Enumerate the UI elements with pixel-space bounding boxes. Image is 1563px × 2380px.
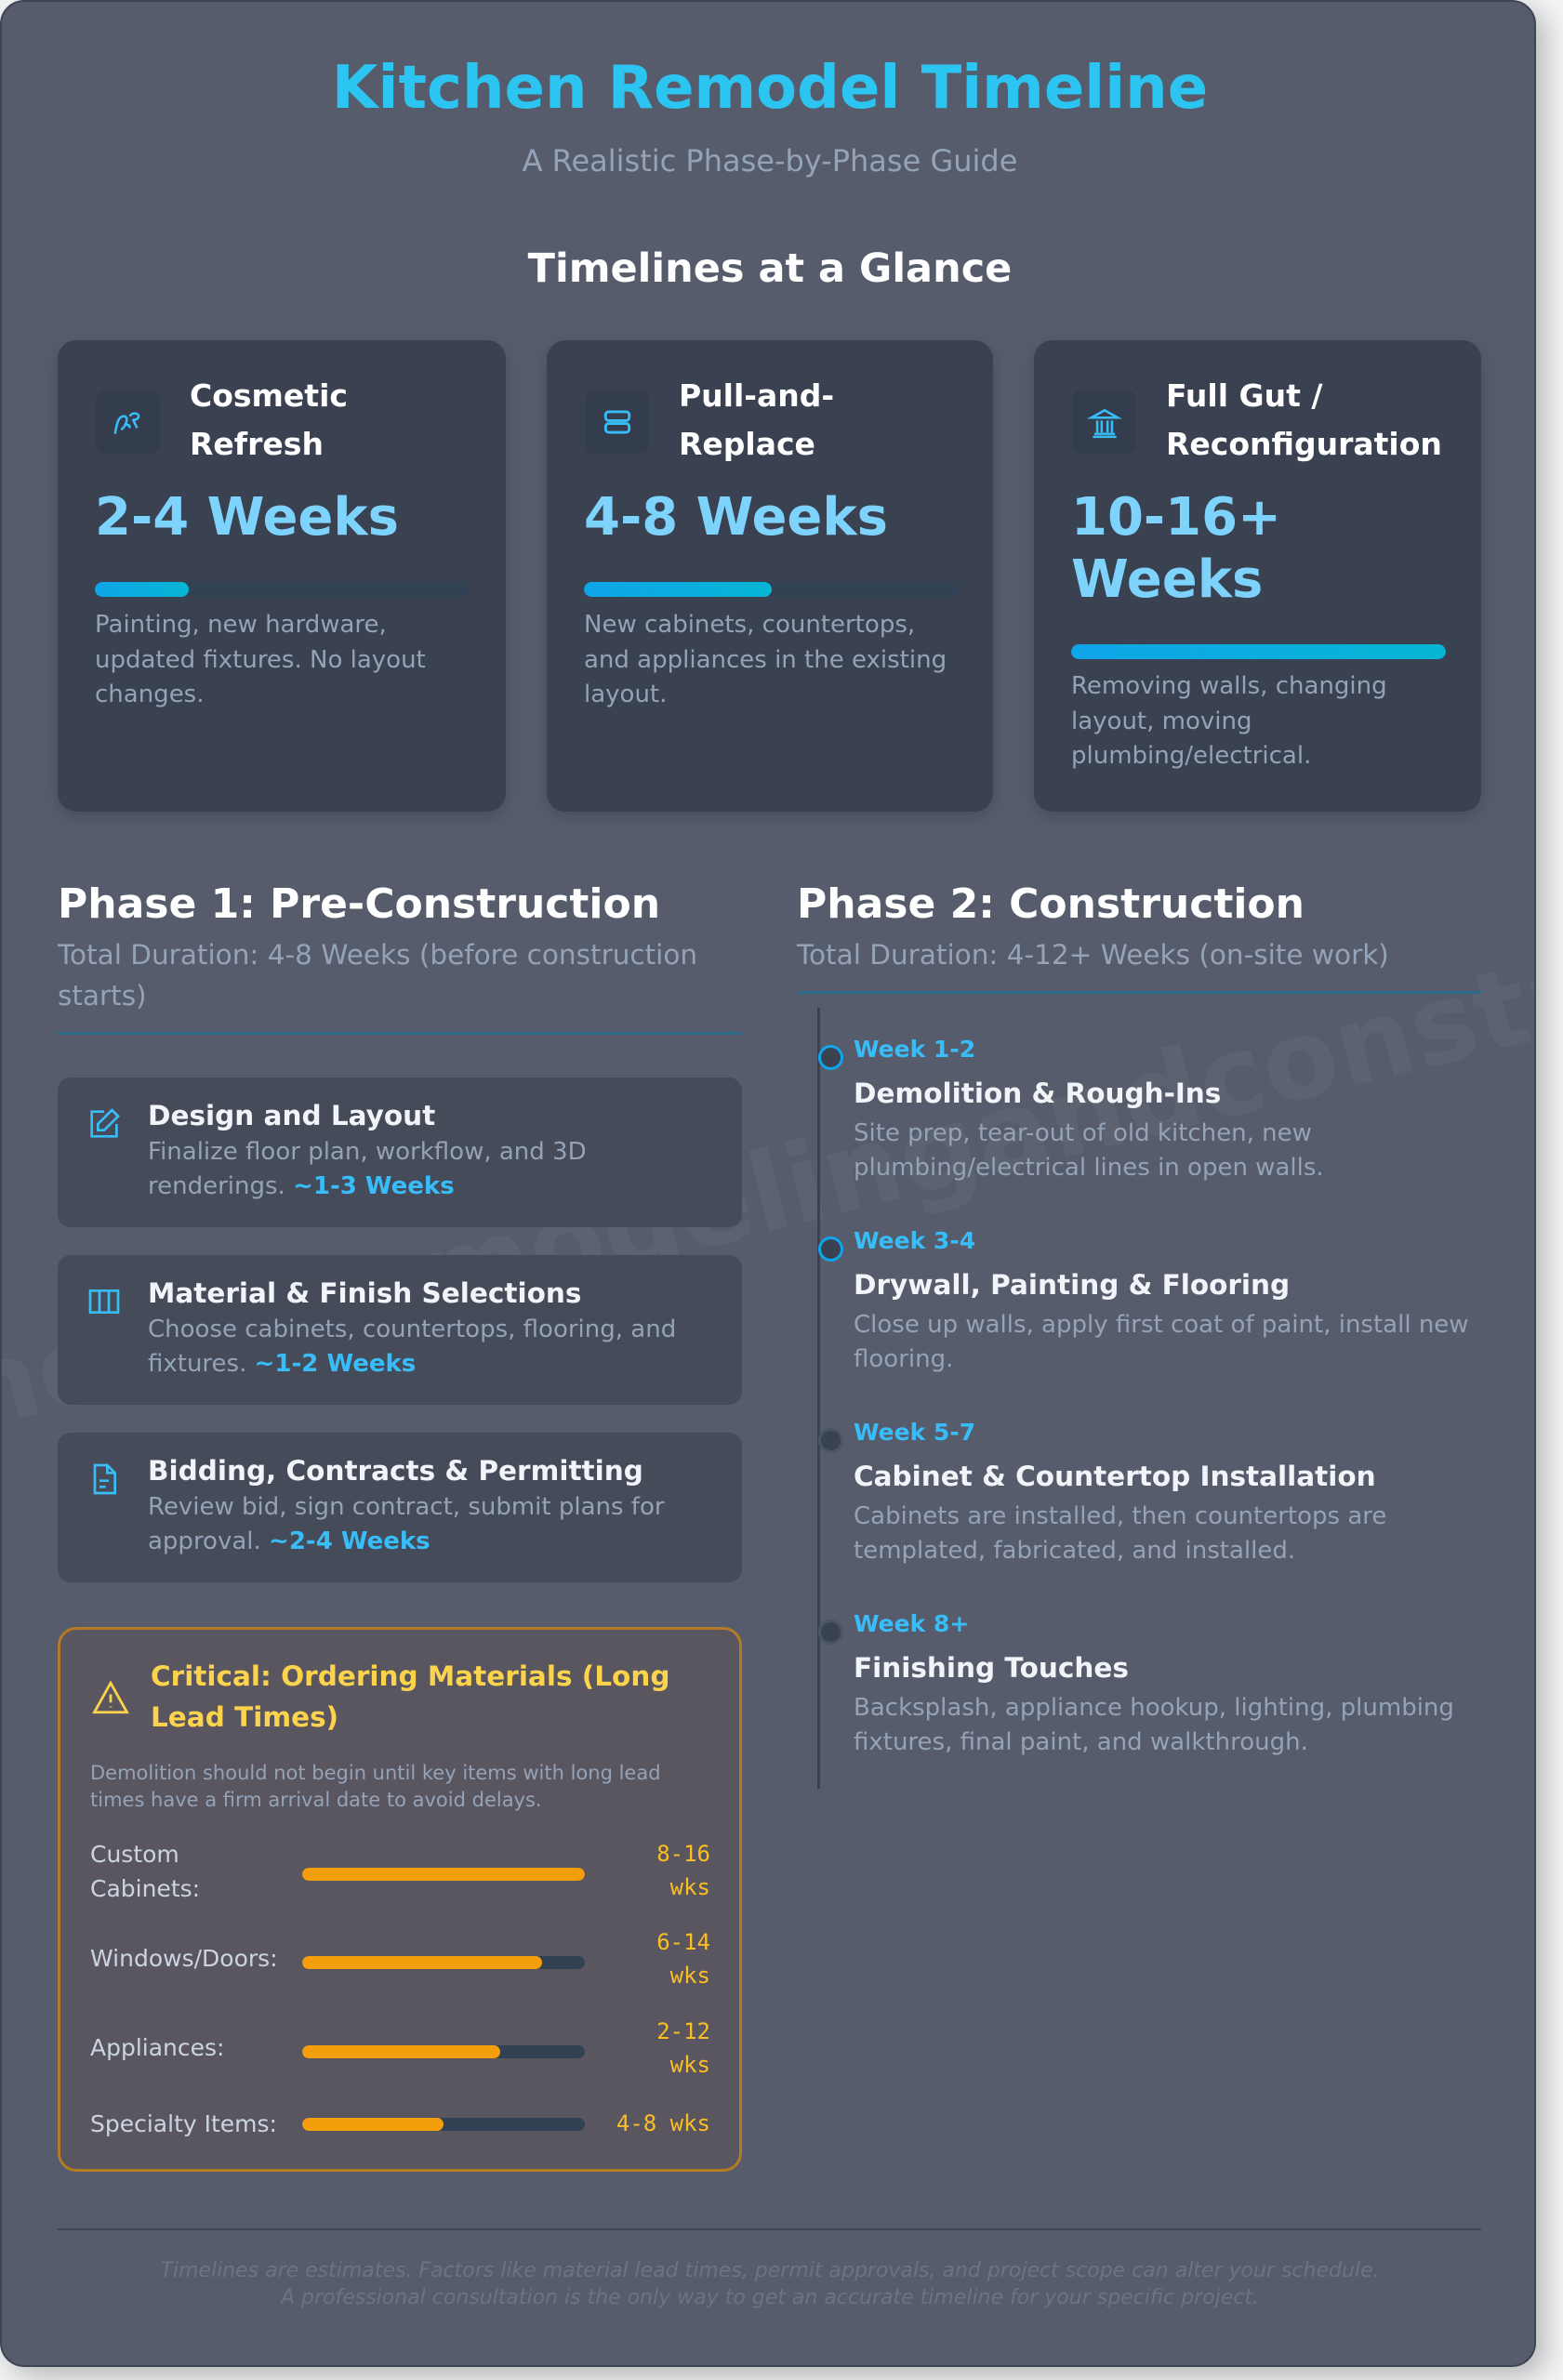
main card: Close up walls, apply first coat of paint, install new flooring.	[854, 1311, 1469, 1373]
lead time chart: 6-14	[656, 1929, 710, 1955]
duration: 10-16+	[1071, 487, 1281, 548]
description: Removing walls, changing layout, moving plumbing/electrical.	[1071, 672, 1387, 770]
step: material selections: Material & Finish Selections	[148, 1277, 581, 1309]
main card: Finishing Touches	[854, 1652, 1129, 1684]
lead time chart: wks	[670, 1874, 710, 1900]
duration bar	[584, 582, 959, 597]
footer note: A professional consultation is the only way to get an accurate timeline for your specific project.	[281, 2286, 1259, 2309]
icon: document	[93, 1463, 116, 1495]
lead time chart: Appliances:	[90, 2034, 224, 2061]
phase 2 duration: Total Duration: 4-12+ Weeks (on-site work)	[797, 939, 1389, 971]
step: design and layout: Finalize floor plan, workflow, and 3D renderings. ~1-3 Weeks	[148, 1138, 587, 1200]
main card: Cabinet & Countertop Installation	[854, 1461, 1376, 1492]
step: bidding	[58, 1433, 742, 1582]
main card: Week 3-4	[854, 1227, 975, 1254]
step: bidding: Bidding, Contracts & Permitting	[148, 1455, 643, 1487]
title: Kitchen Remodel Timeline	[332, 54, 1208, 123]
lead time chart: 2-12	[656, 2018, 710, 2044]
heading: phase 2: Phase 2: Construction	[797, 880, 1305, 928]
duration	[1071, 487, 1281, 610]
panel: full gut	[1034, 340, 1481, 812]
row: windows/doors	[90, 1929, 710, 1989]
callout note: Demolition should not begin until key items with long lead times have a firm arrival date to avoid delays.	[90, 1762, 661, 1811]
row: custom cabinets	[90, 1841, 710, 1902]
main card: Site prep, tear-out of old kitchen, new plumbing/electrical lines in open walls.	[854, 1119, 1324, 1182]
main card: Week 1-2	[854, 1036, 975, 1063]
callout: critical ordering	[58, 1627, 742, 2172]
row: appliances	[90, 2018, 710, 2078]
step: design and layout: Design and Layout	[148, 1100, 435, 1131]
timeline item: week 5-7	[818, 1419, 1386, 1565]
duration: 2-4 Weeks	[95, 487, 399, 548]
step: material selections: Choose cabinets, countertops, flooring, and fixtures. ~1-2 Weeks	[148, 1316, 676, 1378]
lead time chart: 8-16	[656, 1841, 710, 1867]
lead time chart: Custom	[90, 1841, 179, 1868]
lead time chart: Specialty Items:	[90, 2110, 277, 2137]
lead time chart: wks	[670, 2052, 710, 2078]
heading: timelines at a glance: Timelines at a Glance	[528, 245, 1012, 292]
card heading	[190, 377, 348, 462]
callout title: Critical: Ordering Materials (Long Lead Times)	[151, 1660, 669, 1733]
duration: 4-8 Weeks	[584, 487, 888, 548]
step: design and layout	[58, 1078, 742, 1227]
description: Painting, new hardware, updated fixtures. No layout changes.	[95, 611, 426, 708]
icon: columns	[89, 1289, 119, 1314]
phase 1 duration: Total Duration: 4-8 Weeks (before construction starts)	[58, 939, 697, 1012]
main card: Demolition & Rough-Ins	[854, 1078, 1221, 1109]
icon: cabinets	[585, 390, 649, 454]
panel: pull-and-replace	[547, 340, 993, 812]
main card: Week 8+	[854, 1610, 969, 1637]
step: material selections	[58, 1255, 742, 1405]
duration bar	[1071, 644, 1446, 659]
icon: brush	[96, 390, 160, 454]
main card: Week 5-7	[854, 1419, 975, 1446]
timeline item: week 1-2	[818, 1036, 1324, 1182]
lead time chart: Cabinets:	[90, 1875, 200, 1902]
description: New cabinets, countertops, and appliances in the existing layout.	[584, 611, 947, 708]
step: bidding: Review bid, sign contract, submit plans for approval. ~2-4 Weeks	[148, 1493, 665, 1555]
subtitle: A Realistic Phase-by-Phase Guide	[523, 143, 1017, 178]
lead time chart: Windows/Doors:	[90, 1945, 278, 1972]
card heading: Cosmetic	[190, 377, 348, 414]
main card: Cabinets are installed, then countertops are templated, fabricated, and installed.	[854, 1502, 1386, 1565]
lead time chart	[90, 1841, 710, 2137]
card heading	[679, 377, 834, 462]
icon: building	[1072, 390, 1136, 454]
icon: warning	[92, 1681, 129, 1714]
footer note: Timelines are estimates. Factors like material lead times, permit approvals, and project scope can alter your schedule.	[160, 2259, 1380, 2282]
card heading	[1166, 377, 1442, 462]
main card: Drywall, Painting & Flooring	[854, 1269, 1290, 1301]
timeline item: week 8+	[818, 1610, 1454, 1756]
duration: Weeks	[1071, 549, 1263, 610]
card heading: Refresh	[190, 426, 324, 462]
timeline item: week 3-4	[818, 1227, 1469, 1373]
lead time chart: 4-8 wks	[616, 2110, 710, 2136]
card heading: Replace	[679, 426, 815, 462]
card heading: Reconfiguration	[1166, 426, 1442, 462]
icon: pencil	[90, 1108, 120, 1138]
duration bar	[95, 582, 470, 597]
heading: phase 1: Phase 1: Pre-Construction	[58, 880, 660, 928]
main card: Backsplash, appliance hookup, lighting, plumbing fixtures, final paint, and walkthrough.	[854, 1694, 1454, 1756]
lead time chart: wks	[670, 1963, 710, 1989]
panel: cosmetic refresh	[58, 340, 506, 812]
card heading: Full Gut /	[1166, 377, 1322, 414]
card heading: Pull-and-	[679, 377, 834, 414]
footer note	[160, 2259, 1380, 2309]
row: specialty	[90, 2110, 710, 2137]
